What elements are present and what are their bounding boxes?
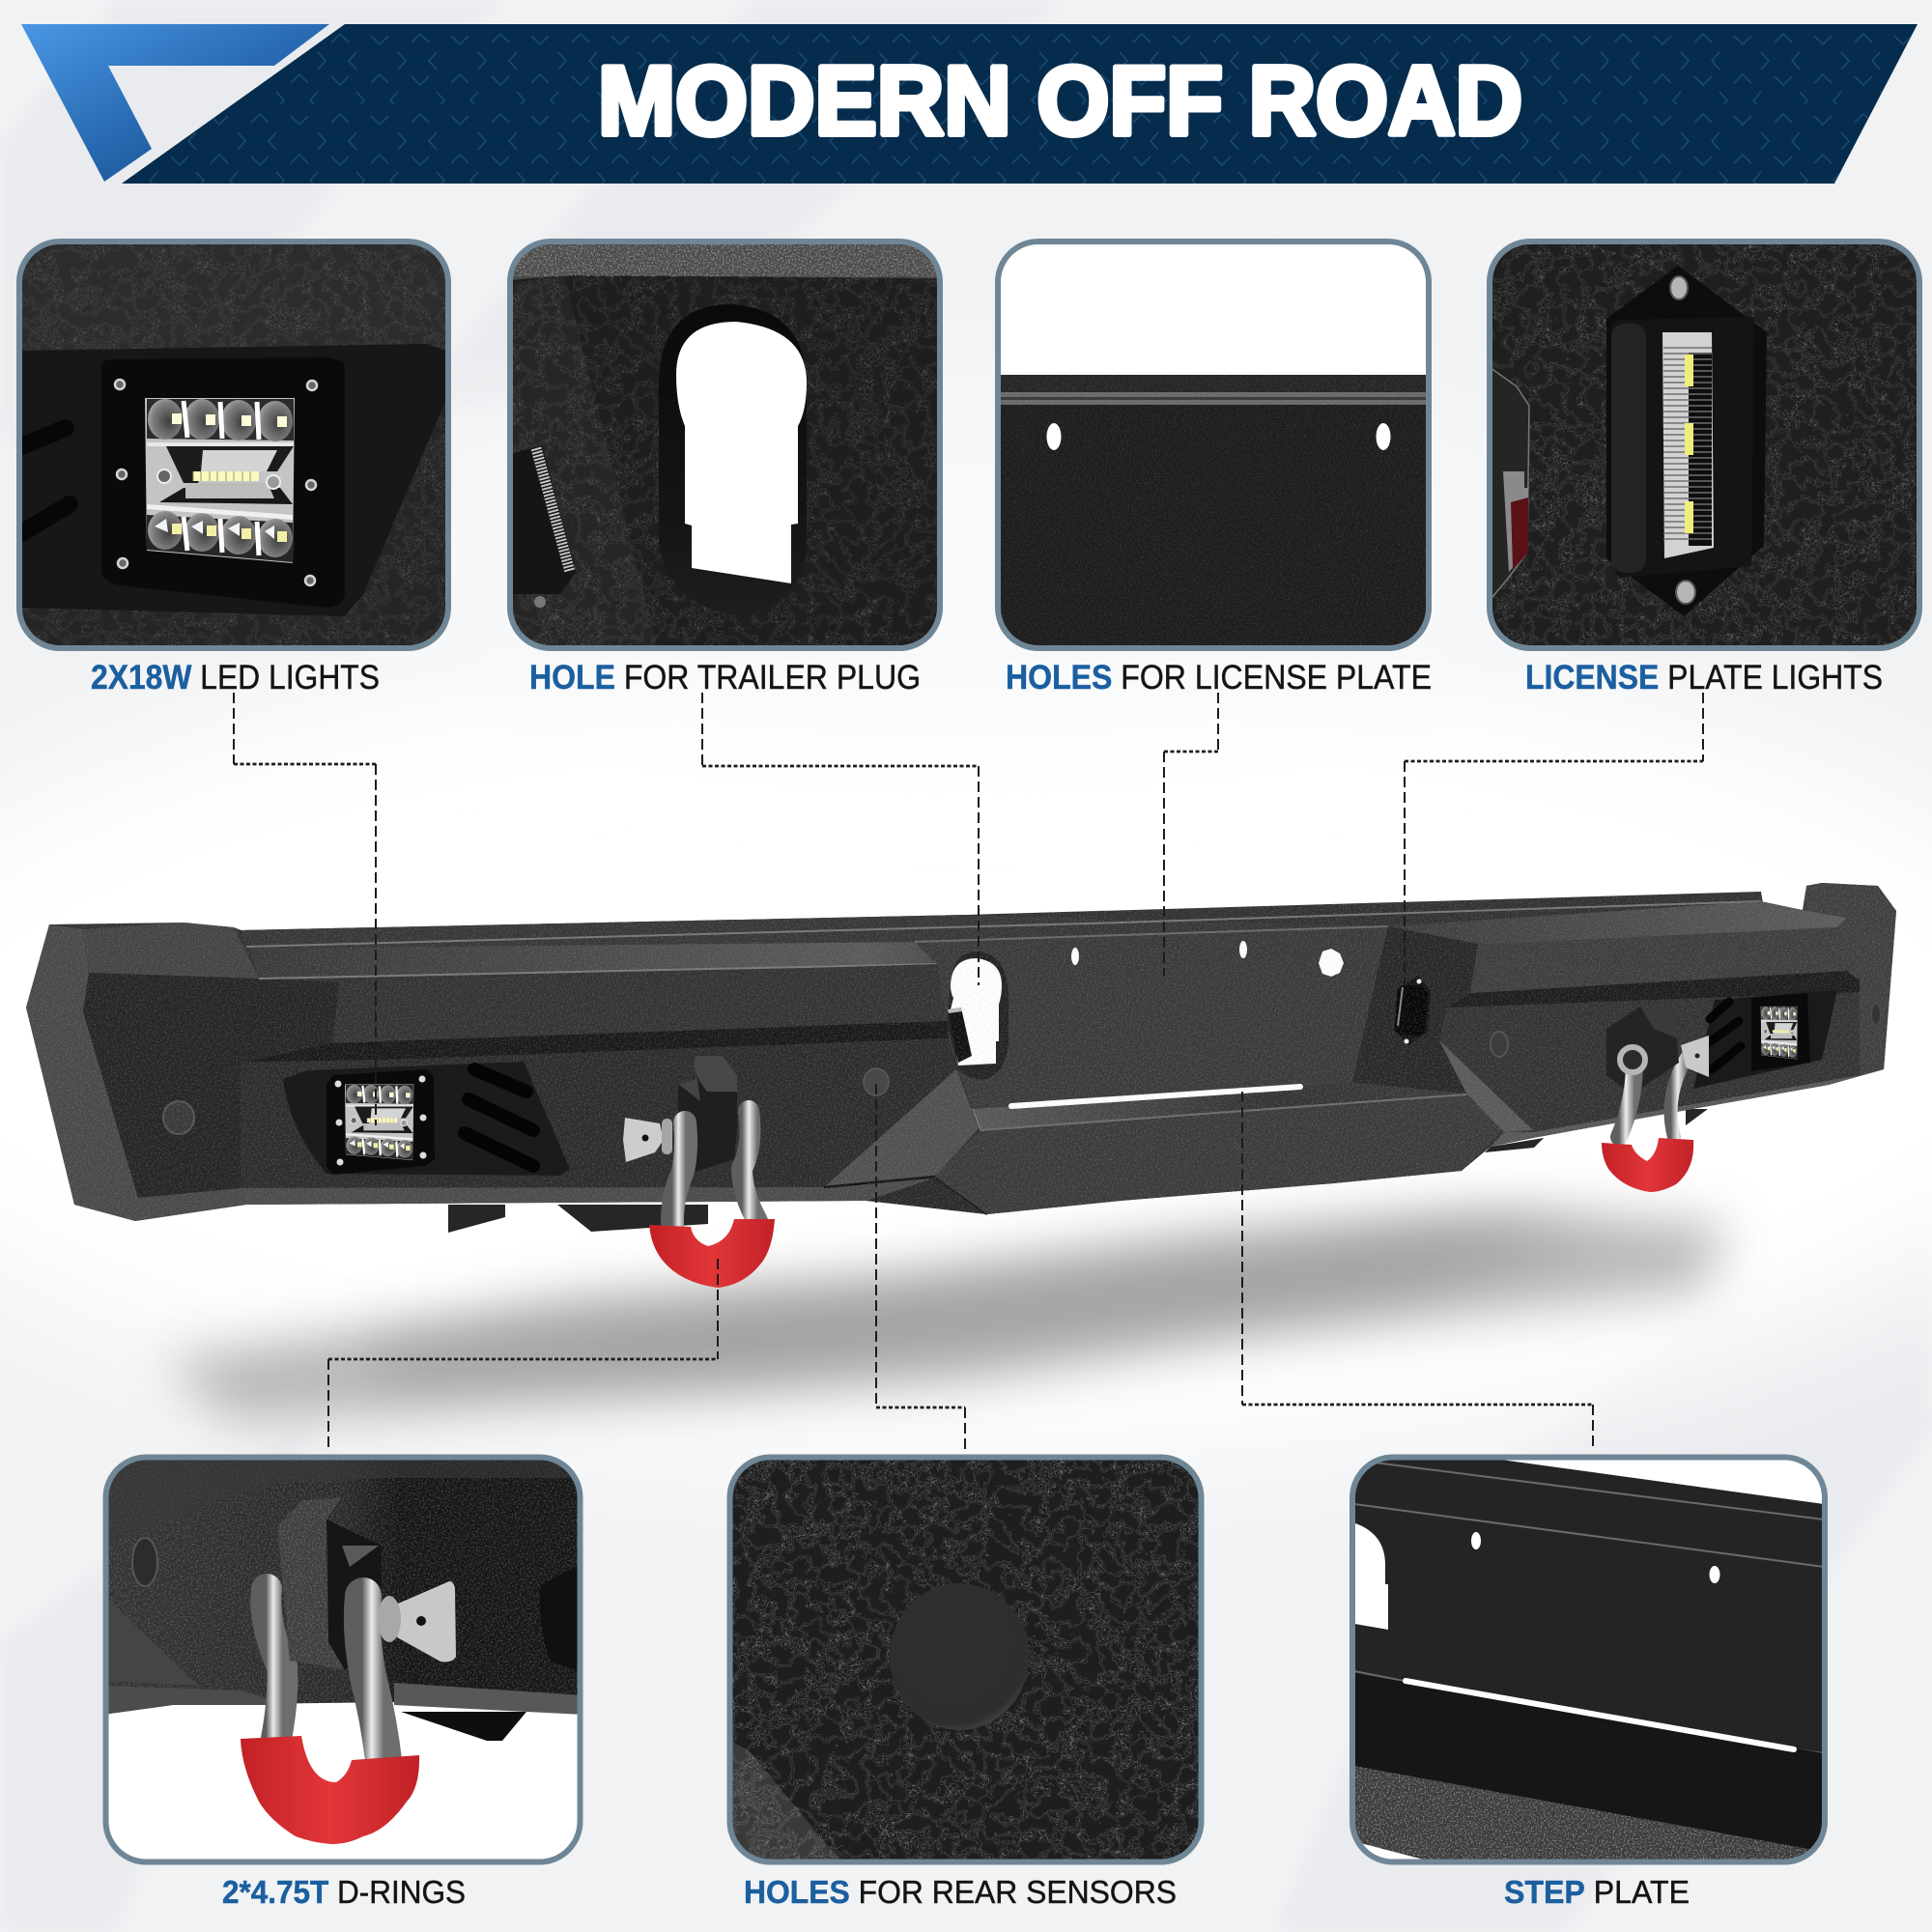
right vents xyxy=(1708,1002,1741,1069)
panel: license plate holes xyxy=(995,239,1432,651)
right lamp recess xyxy=(1693,990,1837,1089)
left lower panel xyxy=(241,1038,958,1187)
left lamp recess xyxy=(283,1062,570,1176)
bumper body xyxy=(26,883,1896,1221)
gusset xyxy=(1352,926,1478,1094)
keyhole cutout xyxy=(659,304,807,616)
pin and tab xyxy=(397,1581,456,1662)
center plate xyxy=(915,926,1388,1109)
trailer hole edge xyxy=(1350,1521,1388,1630)
grain xyxy=(0,869,1932,1236)
sensor cap xyxy=(864,1068,889,1095)
right arm xyxy=(1671,1058,1687,1137)
ground shadow xyxy=(164,1208,1729,1420)
label: D-rings: 2*4.75T D-RINGS xyxy=(222,1874,466,1910)
left arm xyxy=(672,1122,686,1227)
LED lamp housing xyxy=(101,357,345,608)
trailer plug xyxy=(511,445,576,594)
shackle left arm xyxy=(266,1589,282,1744)
license lamp on bumper xyxy=(1394,976,1431,1045)
tab xyxy=(1681,1036,1709,1077)
callout line: trailer plug xyxy=(702,693,979,985)
callout line: rear sensors xyxy=(876,1084,965,1452)
right LED lamp xyxy=(1751,993,1810,1071)
callout line: license plate lights xyxy=(1405,693,1703,985)
panel: trailer plug hole xyxy=(507,239,943,651)
label: LED lights: 2X18W LED LIGHTS xyxy=(91,659,380,696)
right end cap xyxy=(1804,883,1896,1075)
label: rear sensors: HOLES FOR REAR SENSORS xyxy=(744,1874,1177,1910)
license lamp xyxy=(1606,266,1767,616)
label: license plate holes: HOLES FOR LICENSE PLATE xyxy=(1006,659,1432,696)
left vents xyxy=(465,1069,533,1166)
panel: rear sensors xyxy=(726,1454,1205,1865)
light facet xyxy=(824,1069,979,1187)
callout line: LED lights xyxy=(234,693,376,1125)
label: license plate lights: LICENSE PLATE LIGHTS xyxy=(1525,659,1883,696)
right arm xyxy=(742,1111,757,1221)
red cap xyxy=(649,1219,775,1288)
step slot xyxy=(1011,1087,1300,1106)
sensor plug xyxy=(890,1583,1029,1730)
right groove and lower panel xyxy=(1447,971,1860,1022)
shackle bracket xyxy=(277,1497,382,1670)
plate holes xyxy=(1071,941,1344,977)
right bolts xyxy=(1491,1004,1881,1057)
right D-ring xyxy=(1602,1007,1709,1192)
panel: step plate xyxy=(1350,1454,1828,1865)
panel: LED lights xyxy=(16,239,451,651)
label: step plate: STEP PLATE xyxy=(1504,1874,1690,1910)
bumper illustration xyxy=(0,869,1932,1288)
step top xyxy=(973,1083,1466,1130)
banner blue corner emblem xyxy=(21,24,329,182)
upper beam xyxy=(242,915,1388,952)
left D-ring xyxy=(623,1056,775,1288)
left arm xyxy=(1619,1063,1634,1137)
step front xyxy=(935,1095,1504,1214)
callout line: license plate holes xyxy=(1164,693,1218,976)
shackle right arm xyxy=(362,1596,384,1760)
left LED lamp xyxy=(327,1069,435,1175)
right upper slab xyxy=(1388,901,1847,945)
red cap xyxy=(241,1736,419,1844)
callout line: D-rings xyxy=(328,1259,718,1450)
header banner xyxy=(21,24,1918,184)
banner navy ribbon xyxy=(122,24,1918,184)
trailer hole xyxy=(947,952,1009,1080)
left end cap xyxy=(26,923,339,1221)
trailer plug on bumper xyxy=(948,1008,972,1063)
step slot xyxy=(1406,1681,1794,1749)
red cap xyxy=(1602,1138,1693,1192)
license plate slots xyxy=(1047,423,1061,450)
label: trailer plug: HOLE FOR TRAILER PLUG xyxy=(529,659,921,696)
left groove xyxy=(246,1021,949,1062)
panel: license plate lights xyxy=(1487,239,1922,651)
bracket xyxy=(1606,1007,1679,1094)
tab xyxy=(623,1118,664,1162)
panel: D-rings xyxy=(102,1454,583,1865)
callout line: step plate xyxy=(1242,1092,1593,1446)
title: MODERN OFF ROAD xyxy=(598,47,1522,156)
under brackets xyxy=(448,1109,1708,1233)
bracket xyxy=(678,1056,737,1172)
plate slots xyxy=(1471,1532,1481,1549)
